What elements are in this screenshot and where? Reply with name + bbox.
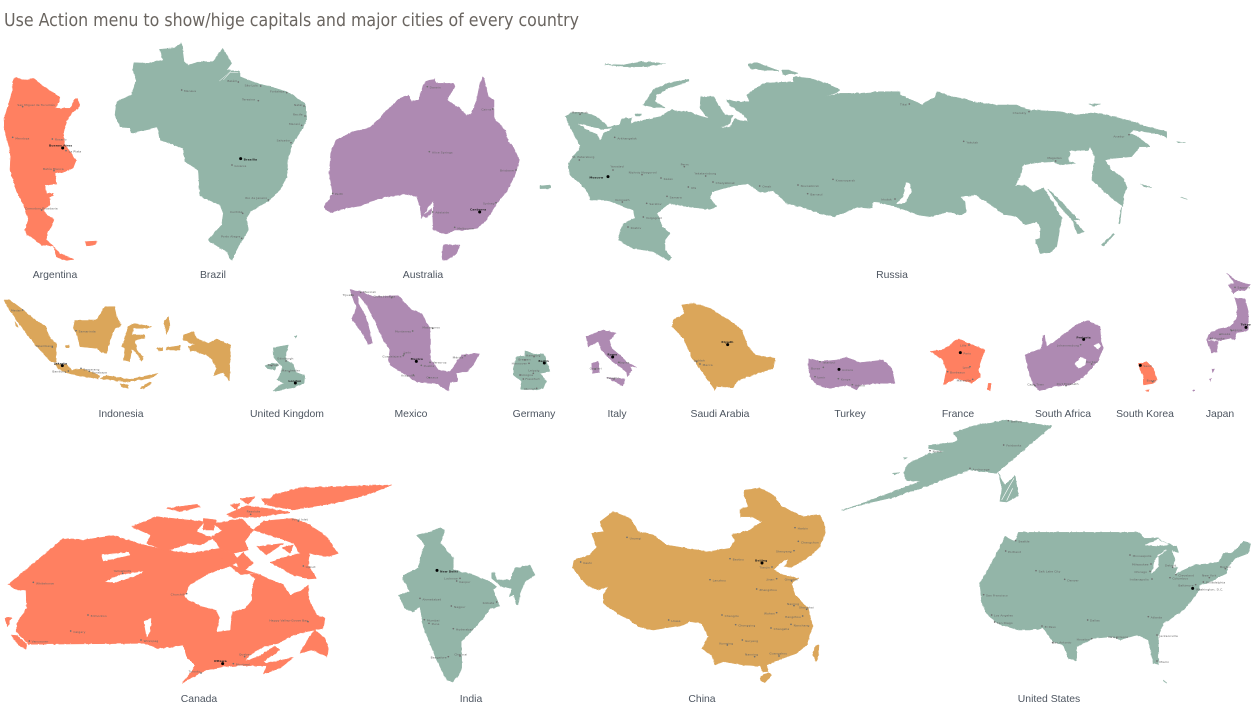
- contiguous states: San Diego: [997, 621, 1013, 625]
- Russia: eastern part: Irkutsk: [881, 198, 892, 202]
- map: Canada: Yellowknife: [114, 569, 131, 573]
- map: Germany: Hannover: [512, 361, 528, 365]
- title: Use Action menu to show/hige capitals and major cities of every country: [4, 11, 579, 31]
- map: Japan: Sapporo: [1237, 285, 1250, 289]
- map: Brazil: Recife: [293, 112, 303, 116]
- map: Canada: Calgary: [73, 630, 86, 634]
- label: Turkey: Turkey: [834, 409, 866, 420]
- map: China: Shenyang: [776, 550, 792, 554]
- map: India: Hyderabad: [456, 628, 473, 632]
- map: China: Kunming: [719, 641, 733, 645]
- map: Canada: Montreal: [236, 662, 250, 666]
- map: Australia: Melbourne: [457, 226, 474, 230]
- map: Brazil: Porto Alegre: [221, 235, 241, 239]
- contiguous states: Baltimore: [1178, 583, 1194, 587]
- contiguous states: Detroit: [1165, 564, 1177, 568]
- map: Indonesia: Semarang: [83, 367, 99, 371]
- map: Mexico: León: [404, 351, 411, 355]
- map: South Korea: Busan: [1147, 378, 1156, 382]
- contiguous states: Los Angeles: [994, 614, 1013, 618]
- contiguous states: San Antonio: [1052, 641, 1072, 645]
- Russia: western part: Rostov: [631, 226, 641, 230]
- map: China: Zhengzhou: [759, 588, 777, 592]
- map: Indonesia: Jakarta: [53, 361, 67, 365]
- map: Indonesia: Medan: [11, 308, 22, 312]
- map: Canada: Winnipeg: [144, 639, 158, 643]
- Russia: eastern part: Tiksi: [899, 103, 907, 107]
- map: China: Hangzhou: [785, 615, 801, 619]
- contiguous states: Miami: [1159, 660, 1169, 664]
- map: Canada: Iqaluit: [306, 565, 316, 569]
- map: United Kingdom: Belfast: [268, 363, 279, 367]
- map: France: Marseille: [957, 378, 971, 382]
- map: Canada: Vancouver: [32, 640, 49, 644]
- map: South Africa: Cape Town: [1027, 383, 1044, 387]
- map: Germany: Frankfurt: [525, 377, 540, 381]
- map: Saudi Arabia: Mecca: [703, 363, 713, 367]
- map: Brazil: Belém: [227, 79, 237, 83]
- label: Italy: Italy: [607, 409, 627, 420]
- label: Brazil: Brazil: [200, 270, 226, 281]
- map: China: Lhasa: [671, 619, 681, 623]
- map: Mexico: Acapulco: [401, 373, 415, 377]
- map: Australia: Sydney: [483, 201, 495, 205]
- map: China: Lanzhou: [713, 579, 726, 583]
- contiguous states: Atlanta: [1151, 616, 1162, 620]
- map: China: Nanchang: [794, 623, 810, 627]
- Russia: western part: Ufa: [691, 186, 696, 190]
- map: China: Nanjing: [787, 602, 799, 606]
- Russia: western part: Nizhniy Novgorod: [629, 171, 657, 175]
- map: Brazil: Goiania: [234, 164, 246, 168]
- Russia: western part: Moscow: [589, 176, 603, 180]
- Russia: eastern part: Anadyr: [1113, 135, 1125, 139]
- map: Italy: Rome: [607, 353, 617, 357]
- map: China: Beijing: [755, 558, 767, 562]
- Russia: western part: Novosibirsk: [801, 184, 819, 188]
- contiguous states: [980, 532, 1251, 683]
- label: Germany: Germany: [513, 409, 556, 420]
- map: Mexico: Veracruz: [433, 361, 447, 365]
- map: China: Nanning: [745, 653, 758, 657]
- map: Brazil: [115, 43, 307, 261]
- contiguous states: Denver: [1067, 578, 1079, 582]
- map: Canada: Churchill: [171, 593, 185, 597]
- map: China: Guiyang: [745, 639, 758, 643]
- map: United Kingdom: Manchester: [282, 368, 301, 372]
- map: India: Kanpur: [459, 580, 471, 584]
- map: Italy: [586, 330, 637, 386]
- map: Turkey: Bursa: [811, 366, 820, 370]
- Russia: western part: Murmansk: [572, 111, 588, 115]
- map: Mexico: [342, 290, 479, 391]
- map: Australia: Canberra: [470, 208, 486, 212]
- map: Germany: Leipzig: [528, 369, 540, 373]
- map: Mexico: Monterrey: [395, 329, 411, 333]
- map: Australia: Brisbane: [500, 168, 514, 172]
- map: Indonesia: Palembang: [36, 344, 53, 348]
- map: China: Changsha: [774, 627, 789, 631]
- contiguous states: Chicago: [1134, 570, 1147, 574]
- Russia: western part: Volgograd: [646, 216, 662, 220]
- map: India: Nagpur: [454, 605, 466, 609]
- contiguous states: Columbus: [1172, 577, 1188, 581]
- map: India: Pune: [432, 622, 439, 626]
- map: Germany: Munich: [524, 387, 536, 391]
- Russia: western part: Omsk: [762, 185, 771, 189]
- map: Italy: Palermo: [607, 376, 620, 380]
- contiguous states: Salt Lake City: [1039, 569, 1061, 573]
- map: Turkey: Istanbul: [823, 361, 835, 365]
- map: Brazil: Fortaleza: [270, 90, 285, 94]
- map: South Africa: Johannesburg: [1056, 343, 1079, 347]
- label: China: China: [688, 694, 716, 705]
- contiguous states: Seattle: [1018, 539, 1030, 543]
- Russia: western part: Chelyabinsk: [716, 181, 735, 185]
- label: Russia: Russia: [876, 270, 908, 281]
- Canada: Arctic archipelago: [132, 485, 392, 579]
- map: Brazil: Maceió: [289, 122, 300, 126]
- map: India: Mumbai: [427, 619, 440, 623]
- map: Turkey: Konya: [841, 378, 851, 382]
- map: Japan: Fukuoka: [1212, 337, 1225, 341]
- map: China: Changchun: [801, 540, 819, 544]
- map: Argentina: San Miguel de Tucumán: [17, 103, 55, 107]
- label: Indonesia: Indonesia: [98, 409, 144, 420]
- map: Turkey: Izmir: [817, 376, 826, 380]
- map: China: Guangzhou: [769, 652, 787, 656]
- map: Russia: [540, 62, 1187, 261]
- contiguous states: El Paso: [1045, 625, 1056, 629]
- map: France: Lille: [960, 343, 967, 347]
- map: Argentina: [4, 78, 97, 261]
- map: China: Wuhan: [764, 612, 775, 616]
- label: Australia: Australia: [403, 270, 443, 281]
- label: France: France: [942, 409, 974, 420]
- map: France: Bordeaux: [950, 371, 965, 375]
- Alaska: Fairbanks: [1006, 444, 1022, 448]
- contiguous states: Indianapolis: [1130, 578, 1149, 582]
- label: Saudi Arabia: Saudi Arabia: [691, 409, 750, 420]
- map: Mexico: Matamoros: [422, 325, 440, 329]
- contiguous states: Portland: [1008, 550, 1021, 554]
- map: Australia: Cairns: [481, 107, 492, 111]
- map: Japan: Osaka: [1221, 332, 1230, 336]
- Russia: western part: Perm: [681, 162, 689, 166]
- map: India: Lucknow: [444, 576, 458, 580]
- map: South Africa: Port Elizabeth: [1057, 382, 1079, 386]
- map: Mexico: Guadalajara: [382, 354, 402, 358]
- Russia: western part: Barnaul: [810, 192, 823, 196]
- Russia: western part: Samara: [670, 195, 682, 199]
- map: South Africa: Durban: [1086, 360, 1098, 364]
- map: Argentina: Buenos Aires: [49, 144, 72, 148]
- map: Brazil: Curitiba: [230, 210, 243, 214]
- map: Australia: Alice Springs: [432, 151, 453, 155]
- map: Germany: Bremen: [518, 357, 531, 361]
- map: Canada: Quebec: [239, 653, 251, 657]
- label: Argentina: Argentina: [33, 270, 77, 281]
- map: Brazil: Rio de Janeiro: [245, 196, 267, 200]
- map: Australia: Darwin: [430, 86, 441, 90]
- map: Brazil: Salvador: [277, 139, 291, 143]
- label: United Kingdom: United Kingdom: [250, 409, 324, 420]
- map: Germany: [512, 351, 550, 391]
- contiguous states: Minneapolis: [1133, 554, 1152, 558]
- map: China: Harbin: [798, 527, 808, 531]
- map: United States: [842, 420, 1251, 683]
- map: Australia: Adelaide: [435, 211, 449, 215]
- Russia: western part: Arkhangelsk: [617, 136, 637, 140]
- map: India: New Delhi: [440, 569, 458, 573]
- label: Mexico: Mexico: [395, 409, 428, 420]
- map: United Kingdom: London: [288, 379, 301, 383]
- map: South Africa: [1025, 321, 1103, 391]
- Alaska: Barrow: [1011, 420, 1023, 424]
- map: China: Jinan: [766, 578, 774, 582]
- label: South Africa: South Africa: [1035, 409, 1091, 420]
- map: South Africa: Pretoria: [1076, 335, 1091, 339]
- map: United Kingdom: [265, 336, 305, 391]
- map: Canada: Whitehorse: [36, 581, 54, 585]
- contiguous states: Washington, D.C.: [1196, 588, 1223, 592]
- Russia: eastern part: [880, 92, 1187, 253]
- map: China: Baotou: [733, 558, 744, 562]
- map: Germany: Cologne: [520, 373, 533, 377]
- Alaska: Anchorage: [973, 467, 990, 471]
- Russia: western part: [540, 62, 900, 261]
- label: Canada: Canada: [181, 694, 217, 705]
- map: Italy: Naples: [619, 360, 630, 364]
- map: Japan: Tokyo: [1241, 323, 1251, 327]
- Russia: western part: Yaroslavl: [610, 165, 624, 169]
- map: Australia: Perth: [335, 192, 343, 196]
- contiguous states: New York: [1202, 573, 1217, 577]
- contiguous states: San Francisco: [986, 594, 1008, 598]
- map: Canada: Ottawa: [214, 659, 227, 663]
- Russia: eastern part: Yakutsk: [966, 140, 978, 144]
- map: Brazil: Natal: [294, 103, 302, 107]
- map: China: Urumqi: [630, 536, 641, 540]
- map: Argentina: Rosario: [55, 138, 67, 142]
- map: Germany: Hamburg: [526, 353, 541, 357]
- map: Indonesia: Surabaya: [92, 370, 107, 374]
- Alaska: Nome: [933, 449, 942, 453]
- map: India: Ahmedabad: [422, 597, 441, 601]
- Russia: western part: St. Petersburg: [572, 155, 595, 159]
- map: Indonesia: Samarinda: [79, 330, 96, 334]
- map: India: [398, 528, 535, 682]
- map: Turkey: [808, 357, 895, 390]
- map: Japan: [1193, 273, 1251, 392]
- Russia: eastern part: Magadan: [1047, 156, 1062, 160]
- Alaska: [842, 420, 1052, 511]
- map: Canada: Resolute: [247, 510, 260, 514]
- map: Germany: Berlin: [538, 359, 549, 363]
- map: Brazil: São Luís: [245, 83, 258, 87]
- map: China: Kashi: [583, 561, 592, 565]
- map: India: Bangalore: [431, 655, 447, 659]
- map: India: Kolkata: [483, 601, 494, 605]
- map: France: Paris: [963, 352, 971, 356]
- contiguous states: Cleveland: [1178, 574, 1194, 578]
- contiguous states: Dallas: [1090, 619, 1100, 623]
- map: China: Chongqing: [738, 624, 755, 628]
- map: Canada: Happy Valley-Goose Bay: [269, 618, 308, 622]
- map: China: Shanghai: [799, 606, 814, 610]
- map: Mexico: Oaxaca: [426, 375, 438, 379]
- contiguous states: Milwaukee: [1132, 562, 1149, 566]
- label: South Korea: South Korea: [1116, 409, 1174, 420]
- map: United Kingdom: Edinburgh: [277, 357, 293, 361]
- label: United States: United States: [1018, 694, 1080, 705]
- map: Mexico: Ciudad Juárez: [373, 295, 396, 299]
- map: India: Chennai: [454, 653, 467, 657]
- map: China: Qingdao: [785, 578, 798, 582]
- map: Indonesia: [4, 300, 231, 389]
- map: Canada: Toronto: [188, 670, 200, 674]
- contiguous states: New Orleans: [1108, 635, 1129, 639]
- map: Mexico: Mérida: [453, 355, 464, 359]
- map: Argentina: Comodoro Rivadavia: [25, 207, 58, 211]
- map: Australia: [324, 77, 519, 260]
- map: Mexico: Tijuana: [342, 293, 354, 297]
- map: Argentina: La Plata: [69, 150, 81, 154]
- map: Mexico: Puebla: [424, 364, 434, 368]
- contiguous states: Jacksonville: [1158, 634, 1178, 638]
- contiguous states: Boston: [1220, 565, 1231, 569]
- map: Saudi Arabia: Riyadh: [721, 340, 733, 344]
- map: Brazil: Teresina: [241, 98, 255, 102]
- map: South Korea: [1138, 362, 1157, 392]
- map: Mexico: Mexico: [411, 357, 423, 361]
- Russia: western part: Yekaterinburg: [694, 172, 716, 176]
- map: Canada: Edmonton: [91, 614, 107, 618]
- map: Brazil: Manaus: [184, 89, 197, 93]
- map: Canada: [5, 485, 392, 683]
- map: Saudi Arabia: Jeddah: [693, 358, 705, 362]
- map: Italy: Cagliari: [590, 366, 602, 370]
- contiguous states: Houston: [1077, 638, 1090, 642]
- map: Argentina: Mendoza: [15, 136, 30, 140]
- Russia: western part: Voronezh: [615, 198, 630, 202]
- Russia: western part: Saratov: [649, 202, 662, 206]
- map: Brazil: Brasília: [244, 158, 257, 162]
- map: Japan: Nagoya: [1230, 328, 1242, 332]
- label: Japan: Japan: [1206, 409, 1234, 420]
- map: Turkey: Ankara: [842, 368, 853, 372]
- map: Argentina: Bahía Blanca: [43, 167, 64, 171]
- map: Saudi Arabia: [672, 303, 775, 390]
- Russia: western part: Krasnoyarsk: [836, 178, 855, 182]
- map: Indonesia: Bandung: [52, 369, 66, 373]
- map: China: [573, 488, 825, 683]
- map: South Korea: Seoul: [1143, 364, 1152, 368]
- map: China: Chengdu: [725, 614, 739, 618]
- map: France: Lyon: [963, 366, 970, 370]
- label: India: India: [460, 694, 482, 705]
- contiguous states: Philadelphia: [1206, 581, 1225, 585]
- map: Turkey: Adana: [855, 384, 865, 388]
- map: China: Tianjin: [758, 566, 770, 570]
- map: Canada: Pond Inlet: [292, 517, 309, 521]
- map: France: [930, 338, 992, 391]
- map: Mexico: Mexicali: [363, 290, 376, 294]
- Russia: western part: Kazan: [664, 177, 673, 181]
- Russia: eastern part: Cherskiy: [1013, 111, 1027, 115]
